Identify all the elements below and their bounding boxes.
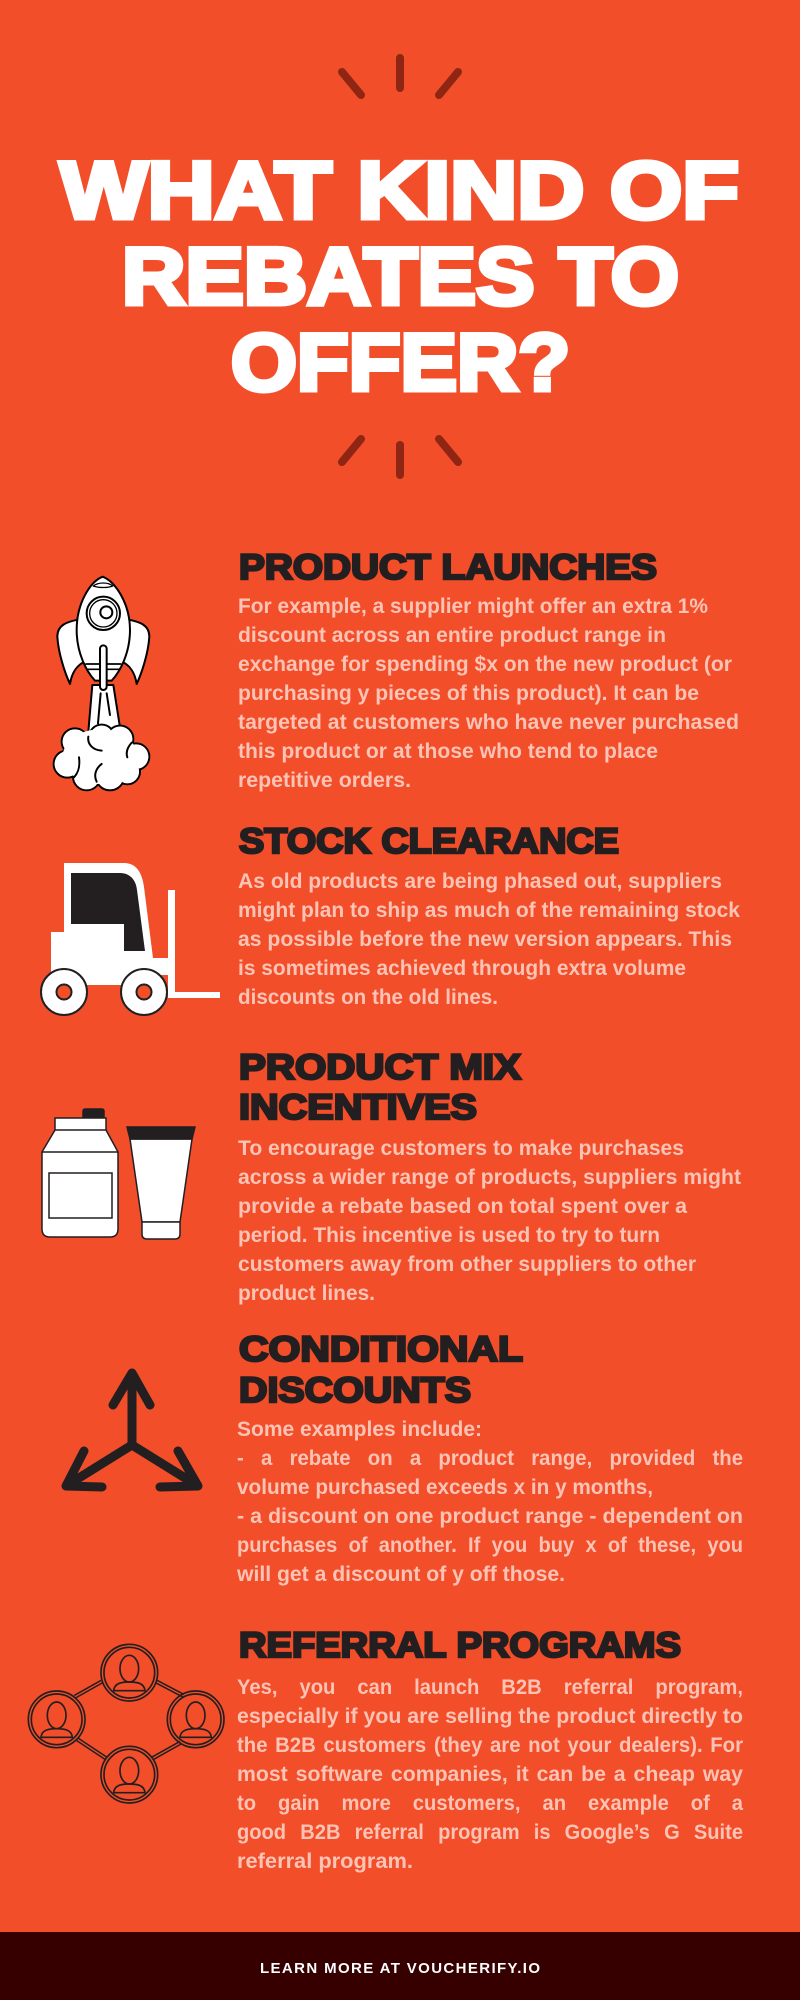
text: product mix body: provide a rebate based on total spent over a <box>238 1195 687 1218</box>
heading: referral programs: REFERRAL PROGRAMS <box>239 1625 681 1665</box>
text: product mix body: product lines. <box>238 1282 375 1305</box>
heading: stock clearance: STOCK CLEARANCE <box>239 821 619 861</box>
panel: product mix incentives <box>42 1047 741 1305</box>
panel: referral programs <box>28 1625 743 1873</box>
text: product launches body <box>238 595 739 792</box>
text: conditional discounts body: purchases of another. If you buy x of these, you <box>237 1534 743 1557</box>
text: stock clearance body: might plan to ship as much of the remaining stock <box>238 899 740 922</box>
text: referral programs body <box>237 1676 743 1873</box>
text: product mix body: To encourage customers to make purchases <box>238 1137 684 1160</box>
title: REBATES TO <box>122 232 679 322</box>
text: stock clearance body: As old products are being phased out, suppliers <box>238 870 722 893</box>
text: product launches body: repetitive orders. <box>238 769 411 792</box>
text: referral programs body: the B2B customers (they are not your dealers). For <box>237 1734 743 1757</box>
text: conditional discounts body <box>236 1418 743 1586</box>
text: conditional discounts body: volume purchased exceeds x in y months, <box>237 1476 653 1499</box>
text: referral programs body: most software companies, it can be a cheap way <box>237 1763 743 1786</box>
panel: product launches <box>54 547 739 792</box>
title: OFFER? <box>231 318 570 408</box>
heading: conditional discounts: CONDITIONAL <box>239 1329 523 1369</box>
icon: bottle and tube <box>42 1109 195 1239</box>
panel: conditional discounts <box>66 1329 743 1586</box>
text: product launches body: For example, a supplier might offer an extra 1% <box>238 595 708 618</box>
text: conditional discounts body: - a rebate on a product range, provided the <box>237 1447 743 1470</box>
heading: product mix incentives <box>239 1047 521 1127</box>
text: conditional discounts body: will get a discount of y off those. <box>236 1563 565 1586</box>
text: product mix body: across a wider range of products, suppliers might <box>238 1166 741 1189</box>
text: referral programs body: especially if you are selling the product directly to <box>237 1705 743 1728</box>
text: referral programs body: to gain more customers, an example of a <box>237 1792 743 1815</box>
heading: conditional discounts <box>239 1329 523 1410</box>
icon: three arrows <box>66 1373 198 1487</box>
text: product launches body: this product or at those who tend to place <box>238 740 658 763</box>
icon: forklift <box>41 863 220 1015</box>
panel: stock clearance <box>41 821 740 1015</box>
icon: referral network <box>28 1644 224 1803</box>
footer bar <box>0 1932 800 2000</box>
text: conditional discounts body: - a discount on one product range - dependent on <box>237 1505 743 1528</box>
text: product launches body: targeted at customers who have never purchased <box>238 711 739 734</box>
heading: conditional discounts: DISCOUNTS <box>239 1370 471 1410</box>
text: referral programs body: good B2B referral program is Google’s G Suite <box>237 1821 743 1844</box>
title <box>60 146 739 408</box>
text: product mix body: period. This incentive is used to try to turn <box>238 1224 660 1247</box>
text: product launches body: purchasing y pieces of this product). It can be <box>238 682 699 705</box>
heading: product mix incentives: INCENTIVES <box>239 1087 477 1127</box>
text: product launches body: discount across an entire product range in <box>238 624 666 647</box>
text: stock clearance body: as possible before the new version appears. This <box>238 928 732 951</box>
text: stock clearance body <box>238 870 740 1009</box>
title: WHAT KIND OF <box>60 146 739 236</box>
text: product mix body: customers away from other suppliers to other <box>238 1253 696 1276</box>
icon: bottom rays <box>342 439 458 475</box>
text: conditional discounts body: Some examples include: <box>237 1418 482 1441</box>
text: referral programs body: Yes, you can launch B2B referral program, <box>237 1676 743 1699</box>
icon: rocket <box>54 577 149 790</box>
heading: product mix incentives: PRODUCT MIX <box>239 1047 521 1087</box>
text: stock clearance body: is sometimes achieved through extra volume <box>238 957 686 980</box>
text: referral programs body: referral program. <box>237 1850 413 1873</box>
text: product mix body <box>238 1137 741 1305</box>
heading: product launches: PRODUCT LAUNCHES <box>239 547 657 587</box>
icon: top rays <box>342 58 458 95</box>
footer text: LEARN MORE AT VOUCHERIFY.IO <box>260 1960 540 1977</box>
text: stock clearance body: discounts on the old lines. <box>238 986 498 1009</box>
text: product launches body: exchange for spending $x on the new product (or <box>238 653 732 676</box>
